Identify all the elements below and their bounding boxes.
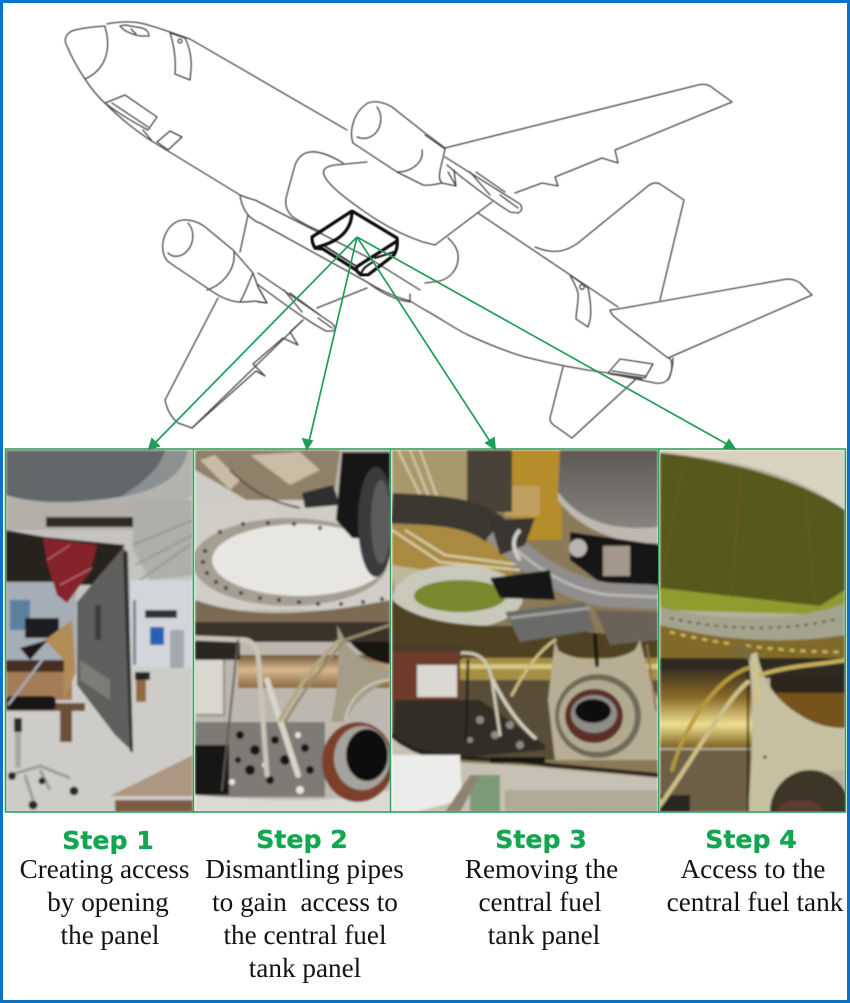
caption: step 3 (465, 825, 618, 950)
caption: step 2 (205, 825, 404, 983)
floor (6, 668, 193, 812)
chair (6, 696, 56, 710)
near wing (286, 84, 732, 283)
caption: step 2: Step 2 (256, 825, 348, 854)
arrow to step 2 (303, 237, 357, 449)
caption: step 1: Creating access (20, 854, 189, 884)
bottom papers (392, 735, 658, 812)
bracket and hole (548, 640, 658, 760)
caption: step 3: Removing the (465, 854, 618, 884)
lower (660, 750, 760, 812)
tail (535, 183, 812, 438)
photo 1: access panel opened (6, 450, 193, 812)
caption: step 4: Access to the (681, 854, 825, 884)
lower (392, 680, 658, 760)
caption: step 1 (20, 826, 189, 950)
caption: step 4: central fuel tank (667, 887, 844, 917)
red cloth (43, 538, 97, 603)
caption: step 4 (667, 825, 844, 917)
arrow to step 1 (149, 237, 357, 449)
gold pipe (459, 656, 658, 681)
caption: step 3: Step 3 (495, 825, 587, 854)
bracket (748, 652, 845, 812)
bracket (331, 625, 390, 722)
far engine (163, 220, 267, 303)
caption: step 1: Step 1 (62, 826, 154, 855)
caption: step 2: Dismantling pipes (205, 854, 404, 884)
caption: step 2: the central fuel (223, 920, 387, 950)
gold band (660, 625, 845, 658)
desk (6, 660, 64, 672)
black fitting (336, 452, 390, 540)
fuel port (322, 722, 394, 802)
far wing (165, 273, 410, 428)
cockpit windows and doors (105, 25, 191, 150)
near engine (352, 102, 456, 186)
tank panel (192, 518, 388, 606)
lower assembly (195, 722, 325, 797)
fuel pipe (660, 670, 760, 748)
caption: step 2: tank panel (249, 953, 362, 983)
central fuel tank highlight (312, 211, 397, 275)
caption: step 2: to gain access to (212, 887, 398, 917)
ducts (392, 508, 495, 530)
hinged panel (77, 548, 133, 752)
caption: step 1: the panel (61, 920, 160, 950)
arrow to step 3 (357, 237, 495, 449)
photo 4: access to central tank (660, 450, 845, 812)
photo 3: removing panel (392, 450, 660, 812)
pipes (238, 655, 390, 688)
fuselage (65, 22, 673, 383)
illustration: aircraft outline (65, 22, 812, 438)
underside oval (6, 450, 166, 503)
arrow to step 4 (357, 237, 735, 449)
green arrows to steps (149, 237, 735, 449)
tank opening (393, 565, 523, 629)
rim (660, 603, 845, 640)
caption: step 4: Step 4 (705, 825, 797, 854)
photo 2: dismantling pipes (192, 450, 394, 812)
caption: step 1: by opening (47, 887, 169, 917)
photo frame (6, 449, 846, 812)
canister (556, 450, 658, 528)
caption: step 3: central fuel (478, 887, 602, 917)
caption: step 3: tank panel (488, 920, 601, 950)
